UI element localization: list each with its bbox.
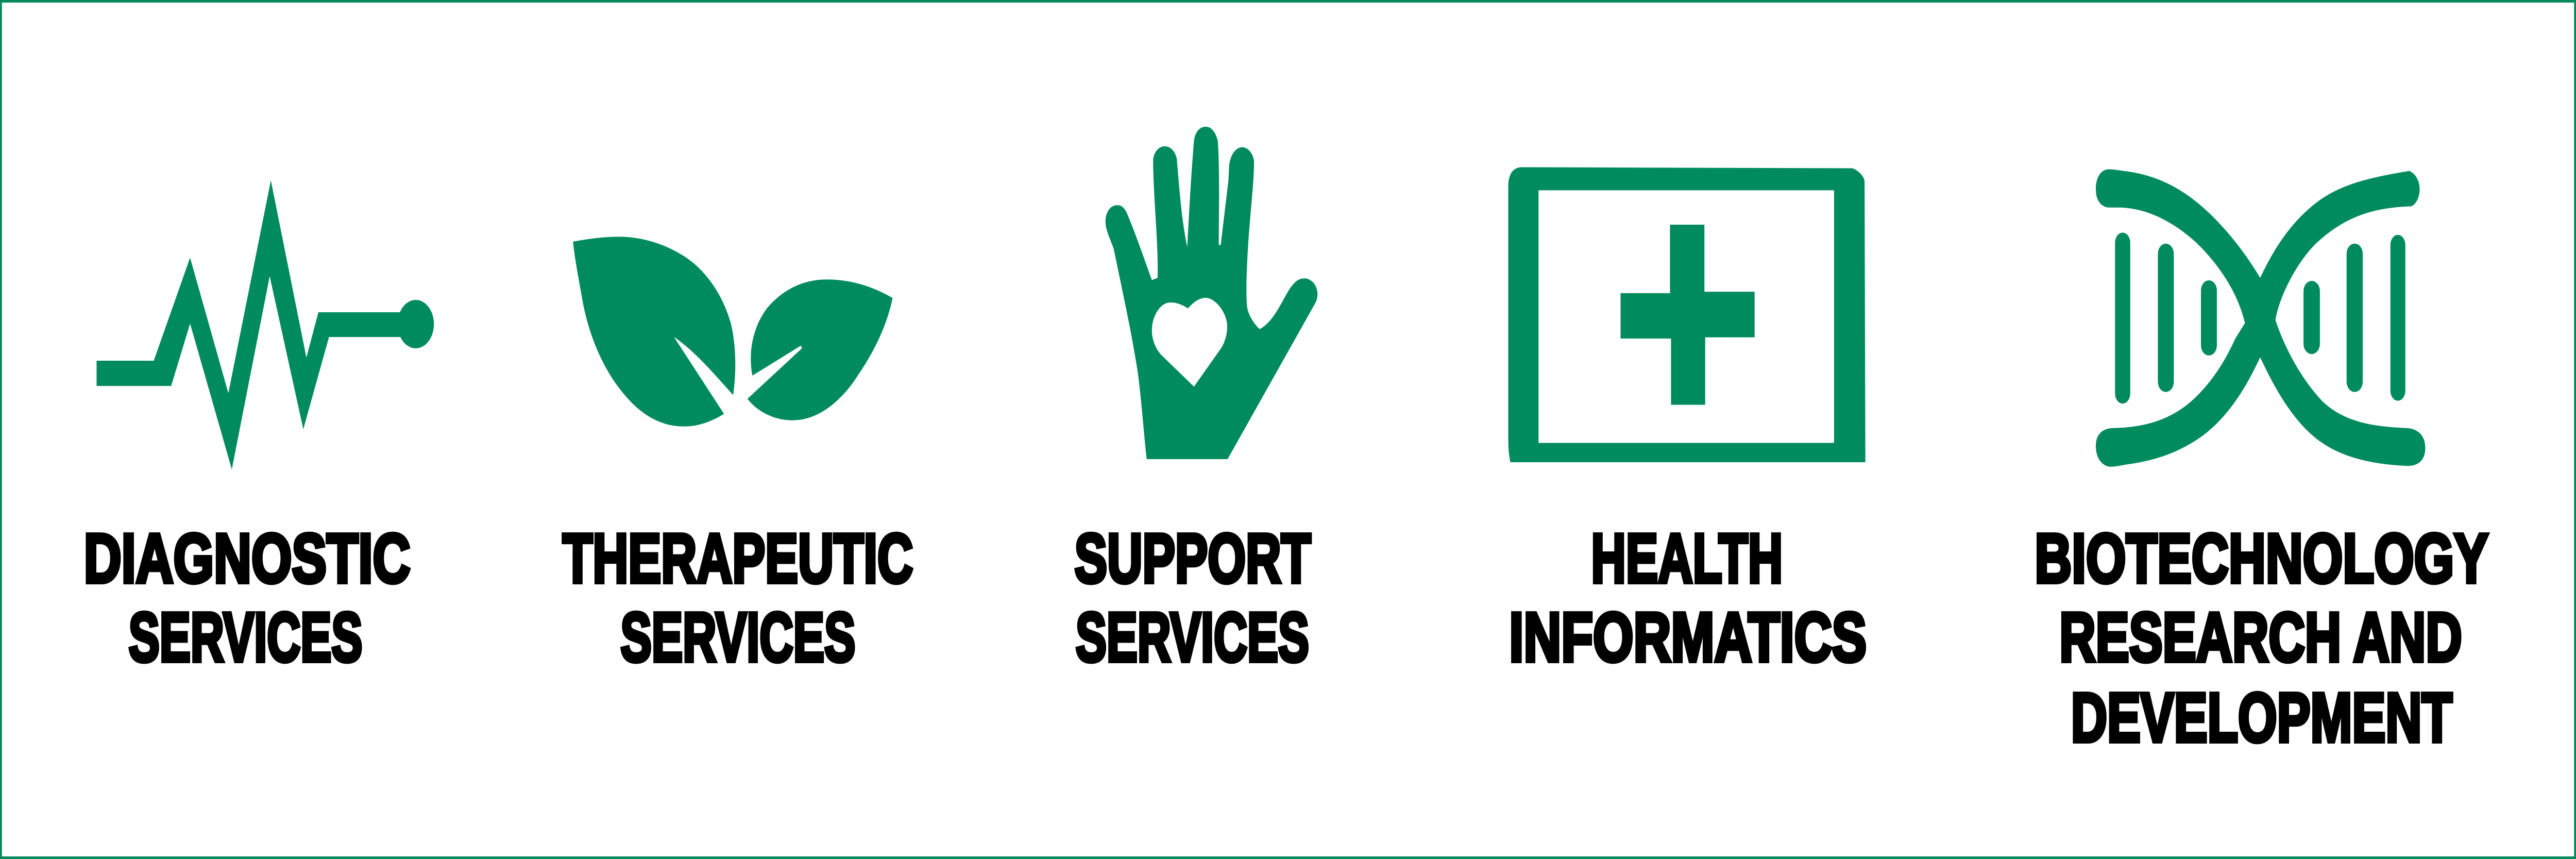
heading: therapeutic services <box>563 520 913 676</box>
heading: biotechnology research and development: DEVELOPMENT <box>2071 679 2452 756</box>
heading: diagnostic services: DIAGNOSTIC <box>84 520 410 597</box>
icon: hand with heart <box>1106 127 1317 459</box>
heading: biotechnology research and development: RESEARCH AND <box>2059 599 2462 676</box>
panel: biotechnology research and development <box>2035 169 2488 756</box>
icon: DNA helix <box>2096 169 2425 467</box>
panel: diagnostic services <box>84 180 434 676</box>
panel: health informatics <box>1509 167 1867 676</box>
heading: health informatics: INFORMATICS <box>1509 599 1867 676</box>
panel: support services <box>1075 127 1317 676</box>
panel: therapeutic services <box>563 237 913 676</box>
icon: medical cross in frame <box>1509 167 1866 462</box>
heading: health informatics: HEALTH <box>1591 520 1783 597</box>
icon: two leaves <box>573 237 893 427</box>
heading: support services <box>1075 520 1311 676</box>
heading: biotechnology research and development <box>2035 520 2488 756</box>
heading: diagnostic services: SERVICES <box>129 599 362 676</box>
heading: biotechnology research and development: BIOTECHNOLOGY <box>2035 520 2488 597</box>
heading: therapeutic services: THERAPEUTIC <box>563 520 913 597</box>
heading: support services: SUPPORT <box>1075 520 1311 597</box>
heading: diagnostic services <box>84 520 410 676</box>
heading: health informatics <box>1509 520 1867 676</box>
icon: heartbeat pulse line <box>96 180 434 469</box>
heading: support services: SERVICES <box>1076 599 1309 676</box>
heading: therapeutic services: SERVICES <box>620 599 855 676</box>
